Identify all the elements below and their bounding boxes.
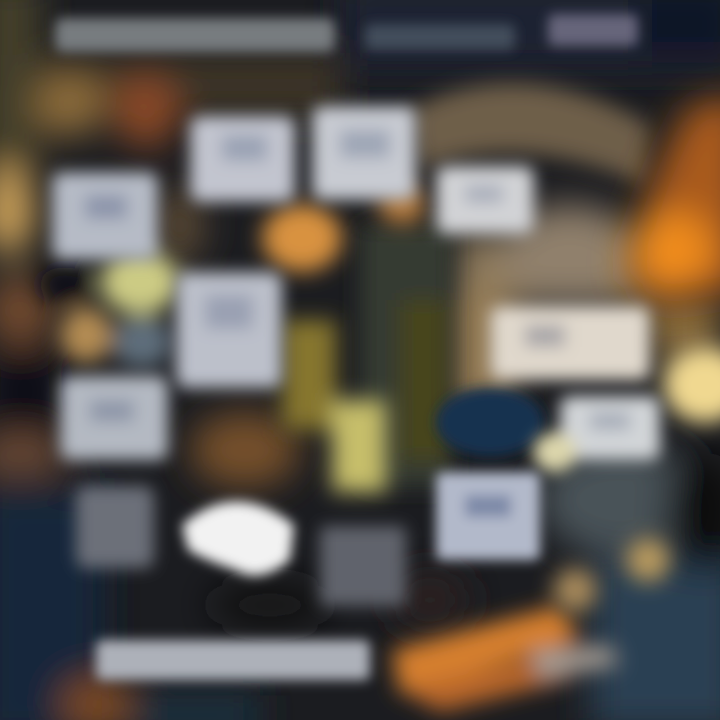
panel: card upper left	[52, 172, 158, 260]
panel: card bottom right	[436, 472, 540, 560]
footer banner left	[96, 640, 370, 680]
central tower	[360, 225, 452, 487]
panel: card middle	[176, 272, 282, 388]
panel: card upper right	[436, 166, 534, 234]
panel: card upper centre left	[190, 116, 295, 202]
bright glow: right edge	[663, 347, 720, 423]
panel: card right wide	[490, 306, 650, 380]
panel: white card bottom centre	[182, 502, 294, 576]
navy blob	[436, 388, 544, 456]
gold bars	[282, 320, 386, 492]
panel: card lower left	[60, 376, 168, 460]
panel: grey card bottom centre	[320, 526, 406, 606]
header band	[55, 14, 638, 52]
small tan accents bottom right	[553, 538, 670, 612]
footer banner right	[392, 605, 620, 712]
panel: grey card bottom left	[76, 486, 154, 568]
flames on the right	[625, 95, 720, 305]
orange glow above gold bars	[262, 185, 426, 272]
panel: card lower right	[533, 396, 660, 472]
left accents	[39, 250, 180, 368]
panel: card upper centre right	[312, 106, 416, 200]
arch at upper right	[410, 83, 650, 185]
